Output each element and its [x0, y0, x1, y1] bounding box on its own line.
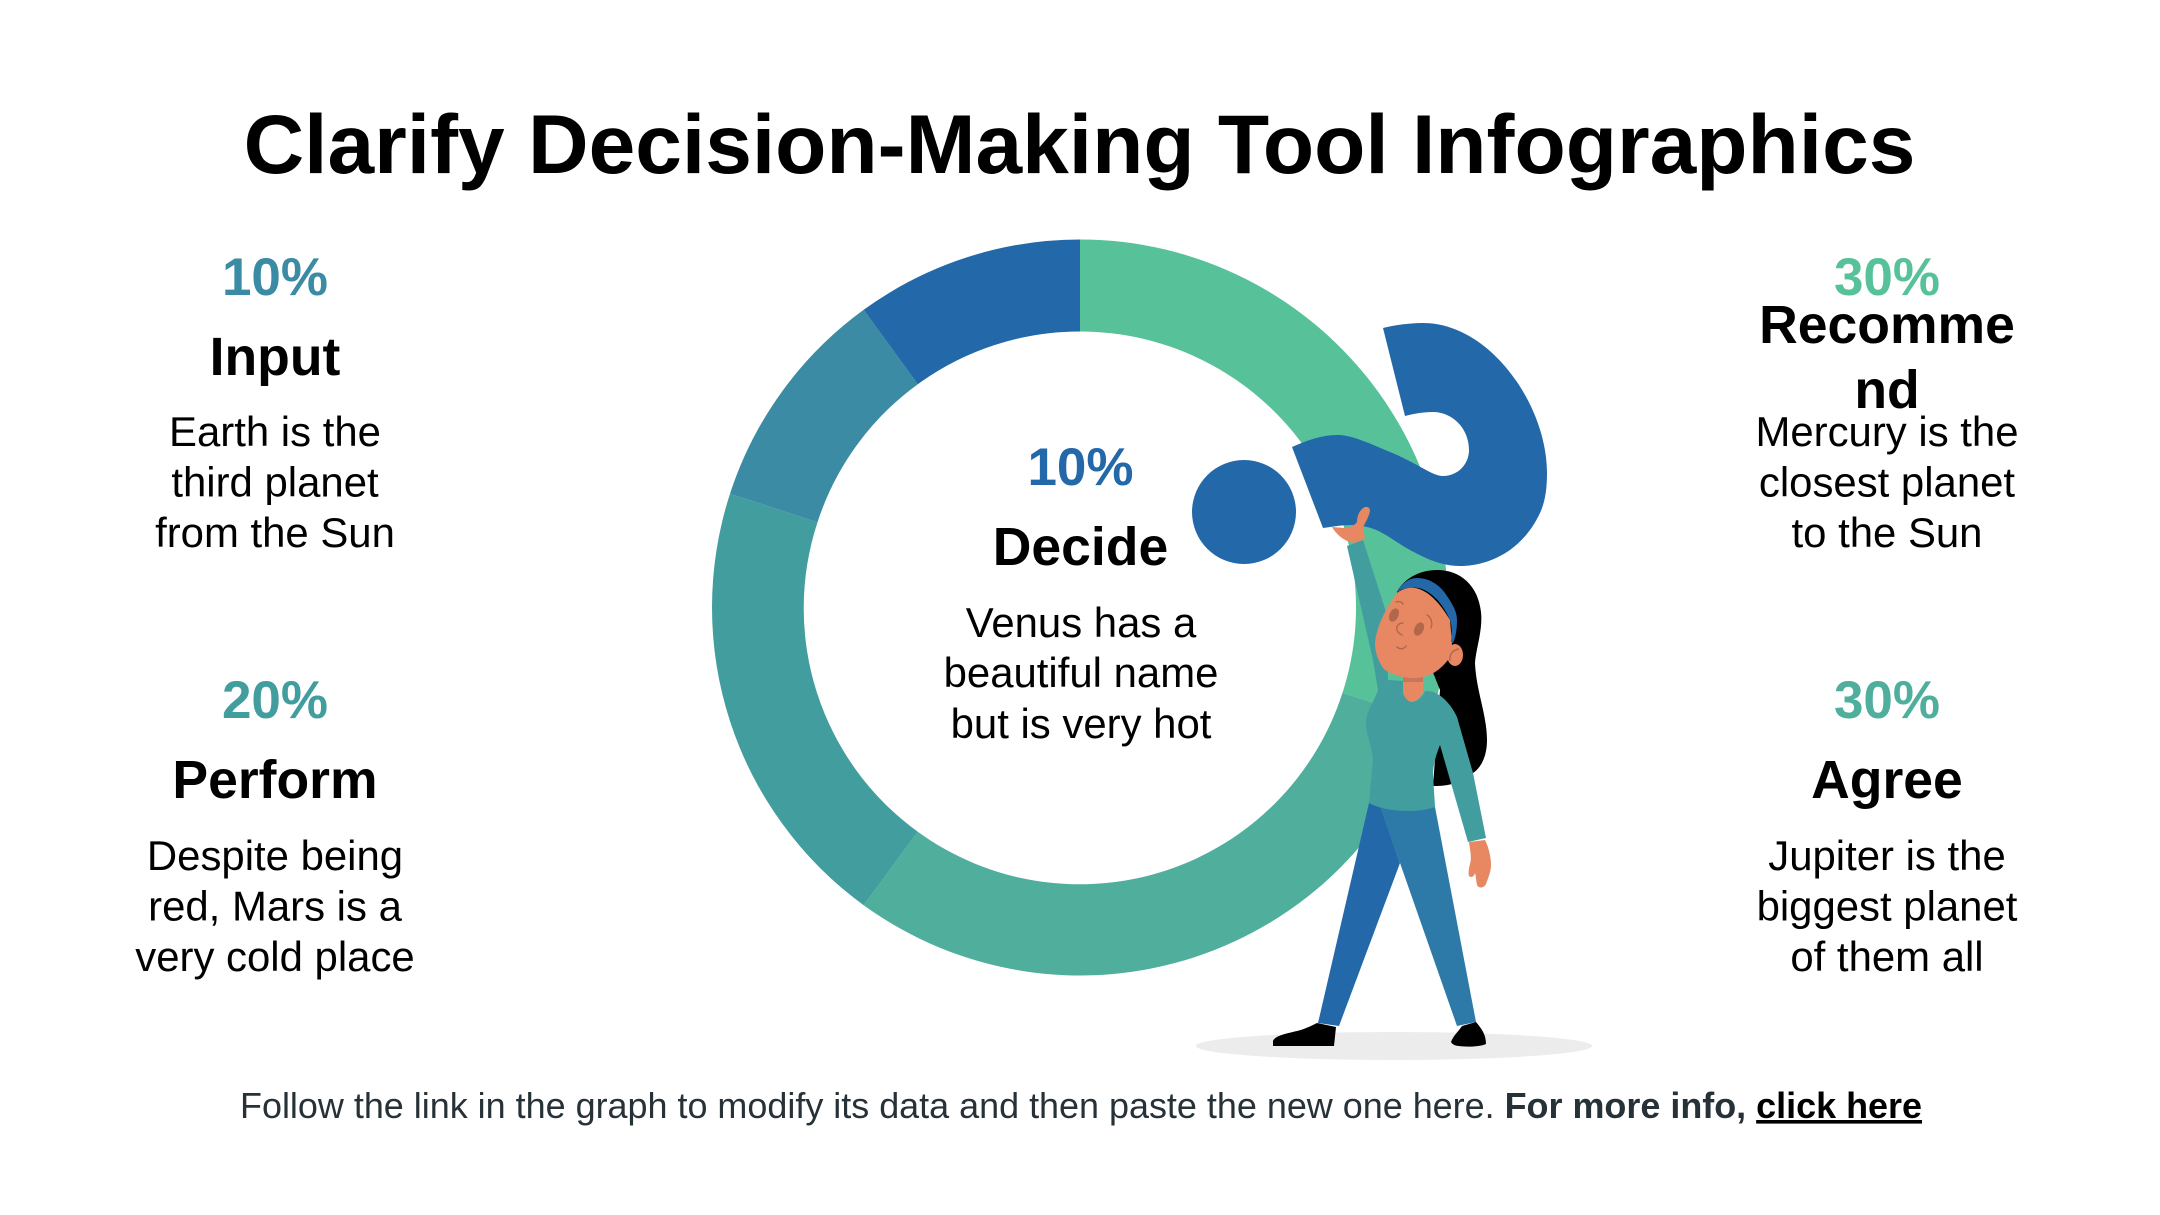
segment: recommend 30% — [1080, 240, 1448, 721]
text block: decide: but is very hot — [951, 700, 1212, 747]
segment: perform 20% — [712, 494, 918, 905]
woman: left shoe — [1273, 1023, 1336, 1046]
illustration: woman holding question mark — [1192, 323, 1592, 1060]
title: Clarify Decision-Making Tool Infographics — [244, 97, 1915, 191]
woman: hair — [1397, 570, 1487, 786]
woman: ear — [1447, 644, 1463, 666]
text block: input — [155, 248, 395, 556]
text block: perform: very cold place — [135, 933, 415, 980]
text block: perform: Despite being — [147, 832, 403, 879]
text block: recommend — [1755, 248, 2019, 556]
text block: agree: of them all — [1790, 933, 1984, 980]
text block: input: third planet — [171, 458, 379, 506]
text block: decide: Venus has a — [966, 599, 1197, 646]
text block: input: from the Sun — [155, 509, 395, 556]
woman: face — [1375, 588, 1452, 678]
text block: recommend: nd — [1854, 361, 1920, 420]
text block: recommend: Mercury is the — [1755, 408, 2019, 455]
text block: recommend: Recomme — [1759, 296, 2015, 355]
woman: sweater with arms — [1347, 540, 1486, 842]
text block: input: 10% — [222, 248, 328, 307]
segment: decide 10% — [864, 240, 1080, 384]
text block: decide — [944, 438, 1218, 747]
woman: facial lines — [1396, 602, 1432, 649]
woman: neck — [1403, 672, 1423, 702]
text block: agree: biggest planet — [1757, 882, 2018, 930]
text block: recommend: to the Sun — [1792, 509, 1982, 556]
text block: decide: Decide — [993, 518, 1168, 577]
text block: decide: beautiful name — [944, 649, 1218, 696]
text block: perform: 20% — [222, 671, 328, 730]
segment: agree 30% — [864, 693, 1430, 975]
woman: back leg — [1318, 803, 1400, 1026]
text block: decide: 10% — [1027, 438, 1134, 497]
icon: question mark — [1192, 323, 1547, 566]
woman: front leg — [1380, 807, 1476, 1026]
woman: lower hand — [1469, 840, 1491, 888]
woman: neck shadow — [1403, 677, 1423, 682]
text block: agree: 30% — [1834, 671, 1940, 730]
footer note: Follow the link in the graph to modify its data and then paste the new one here. For more info, click here — [240, 1085, 1922, 1126]
woman: right shoe — [1451, 1022, 1486, 1047]
text block: agree: Jupiter is the — [1768, 832, 2006, 879]
text block: perform: red, Mars is a — [148, 882, 403, 930]
text block: agree: Agree — [1811, 751, 1963, 810]
woman: eyes — [1387, 607, 1426, 637]
woman: raised hand — [1332, 507, 1370, 543]
segment: input 10% — [730, 310, 918, 522]
woman: headband — [1397, 578, 1457, 643]
text block: recommend: 30% — [1834, 248, 1940, 307]
floor shadow — [1196, 1032, 1592, 1060]
text block: perform: Perform — [172, 751, 378, 810]
text block: perform — [135, 671, 415, 980]
text block: recommend: closest planet — [1759, 458, 2015, 506]
text block: agree — [1757, 671, 2018, 980]
donut chart — [712, 240, 1448, 975]
text block: input: Earth is the — [169, 408, 381, 455]
text block: input: Input — [210, 328, 341, 387]
